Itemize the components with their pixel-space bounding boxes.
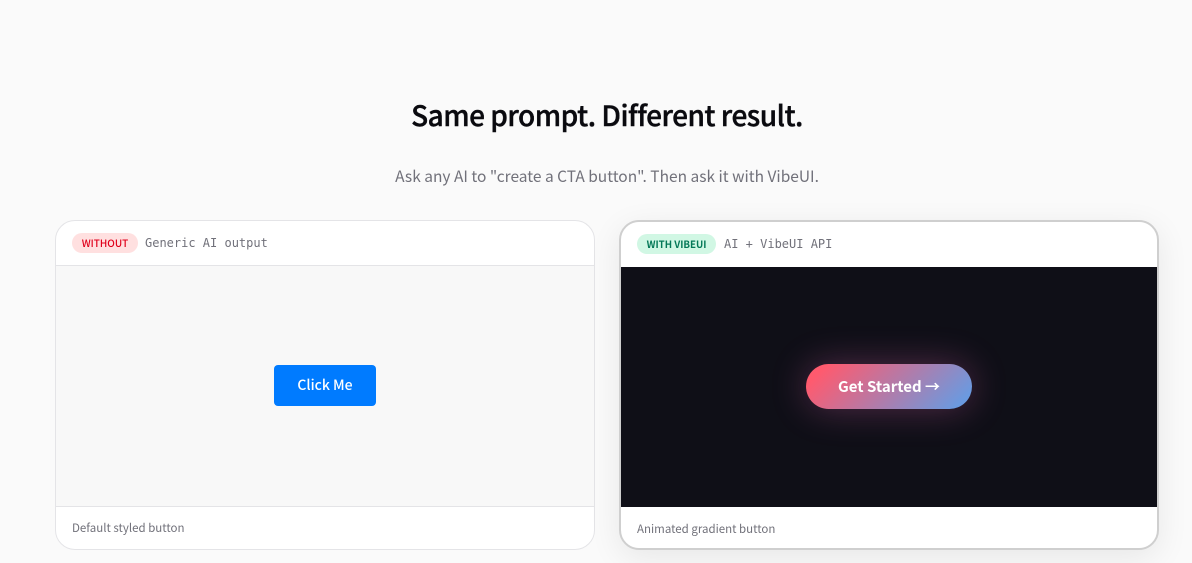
caption: default: Default styled button xyxy=(72,520,185,536)
caption: animated: Animated gradient button xyxy=(637,521,775,537)
label: generic AI output: Generic AI output xyxy=(145,236,268,250)
badge: with VibeUI xyxy=(637,234,716,254)
label: AI + VibeUI API: AI + VibeUI API xyxy=(724,237,832,251)
button: Click Me: Click Me xyxy=(297,375,353,395)
badge: with VibeUI: WITH VIBEUI xyxy=(647,237,706,251)
badge: without: WITHOUT xyxy=(82,235,128,250)
panel: with VibeUI xyxy=(619,220,1159,550)
subtitle: Ask any AI to "create a CTA button". Then ask it with VibeUI. xyxy=(395,165,819,187)
button: Get Started: Get Started → xyxy=(838,376,940,397)
panel: without VibeUI xyxy=(55,220,595,550)
badge: without xyxy=(72,233,138,253)
preview area: gradient button xyxy=(621,267,1157,507)
button: Get Started xyxy=(806,364,972,409)
button: Click Me xyxy=(274,365,376,406)
preview area: default button xyxy=(56,265,594,507)
title: Same prompt. Different result. xyxy=(411,95,803,135)
